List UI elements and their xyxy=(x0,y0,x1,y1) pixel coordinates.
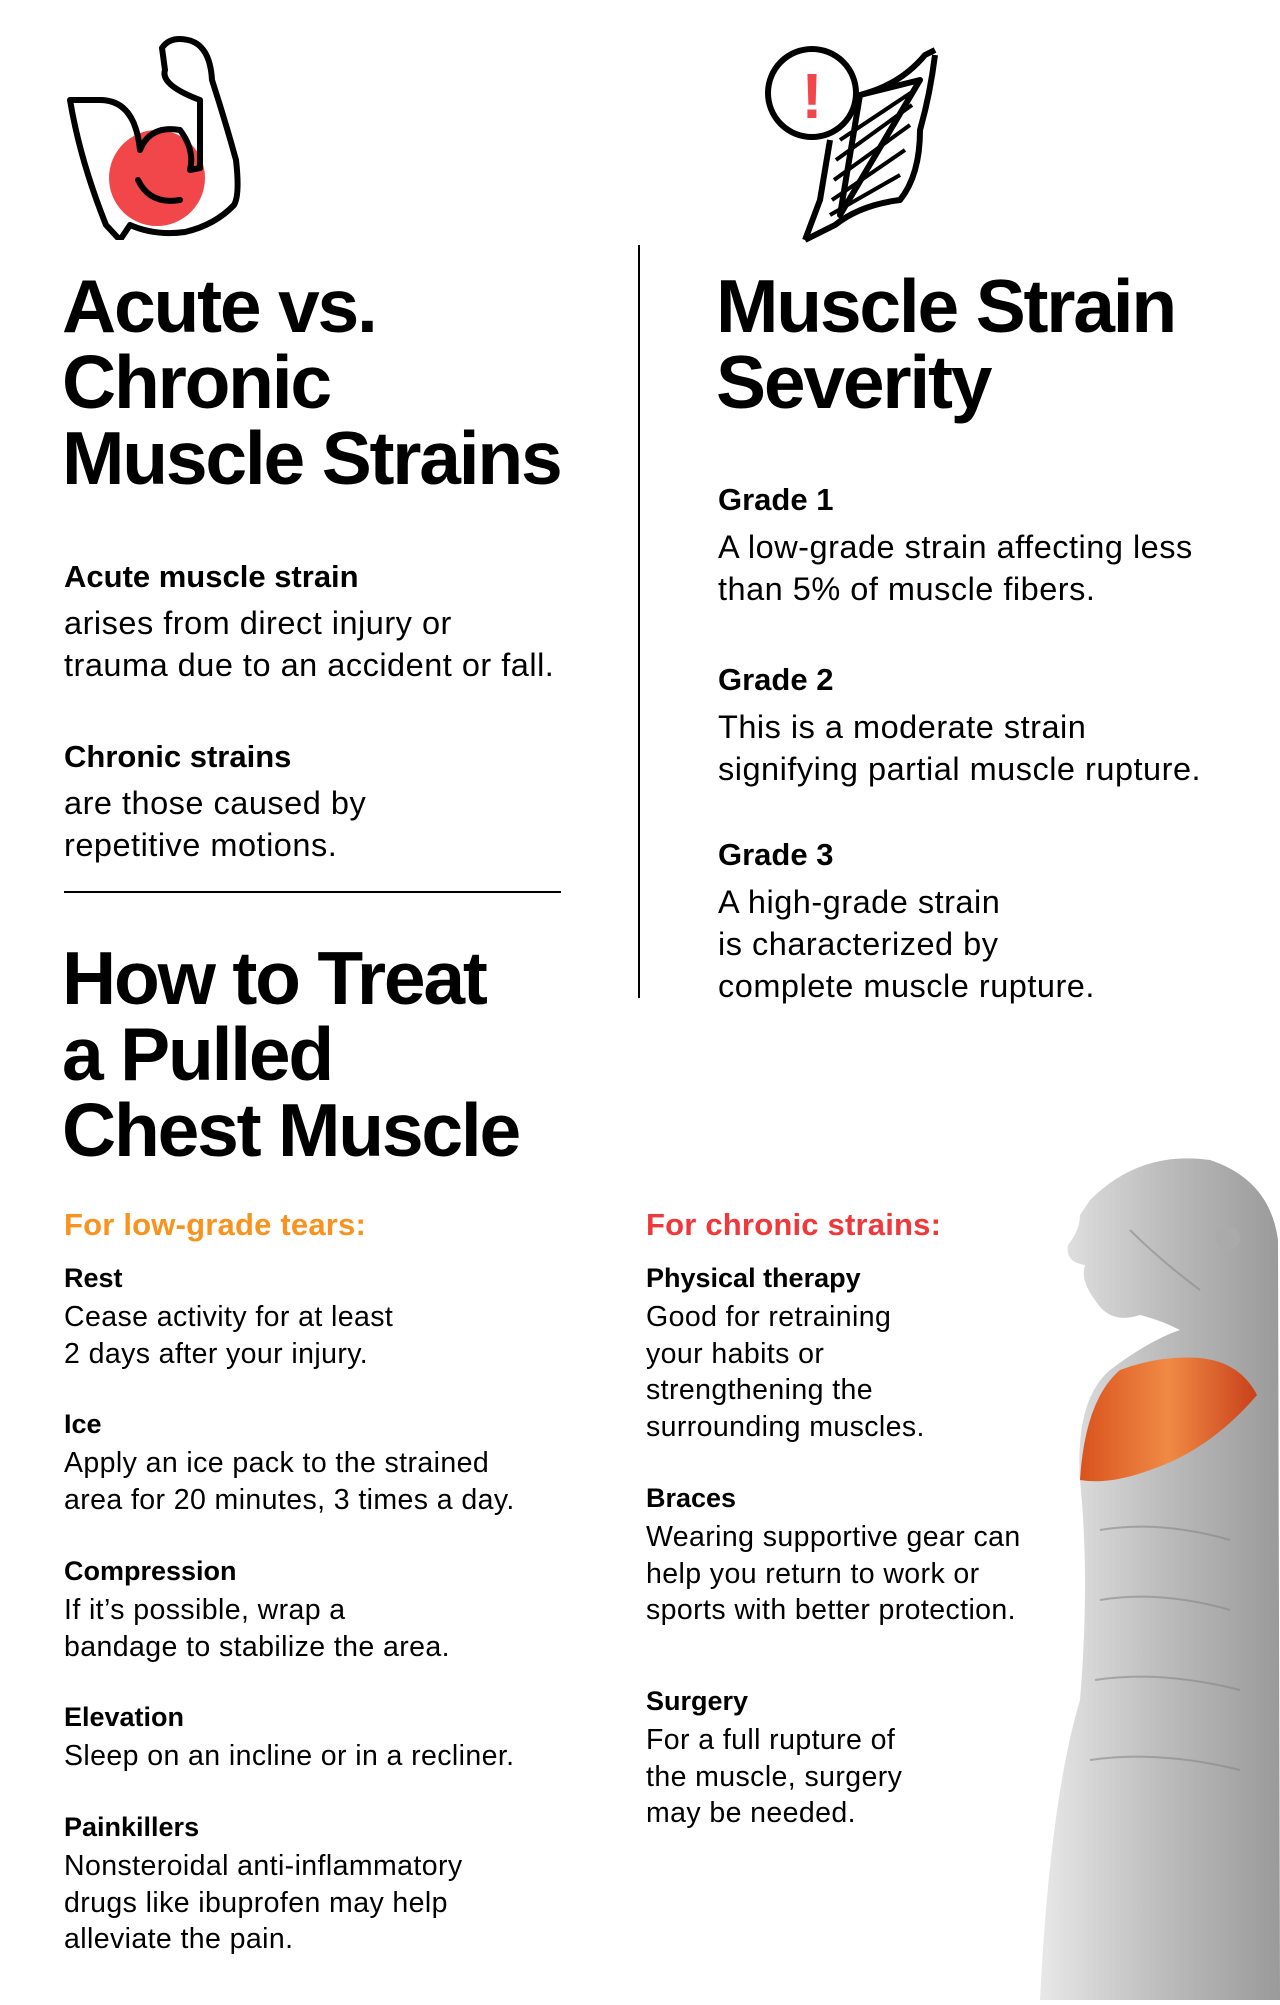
heading: acute vs chronic: Chronic xyxy=(62,340,330,424)
item: surgery: the muscle, surgery xyxy=(646,1760,902,1792)
item: painkillers xyxy=(64,1812,462,1955)
heading: acute vs chronic: Acute vs. xyxy=(62,264,376,348)
grade 2: This is a moderate strain xyxy=(718,709,1086,745)
text block: chronic: repetitive motions. xyxy=(64,827,337,863)
item: braces: sports with better protection. xyxy=(646,1594,1016,1626)
item: physical therapy: surrounding muscles. xyxy=(646,1410,925,1442)
item: physical therapy: strengthening the xyxy=(646,1374,873,1406)
grade 2: signifying partial muscle rupture. xyxy=(718,751,1201,787)
grade 3 xyxy=(718,837,1095,1004)
item: rest xyxy=(64,1263,393,1370)
grade 3: Grade 3 xyxy=(718,837,833,872)
item: ice: area for 20 minutes, 3 times a day. xyxy=(64,1484,515,1516)
item: rest: Cease activity for at least xyxy=(64,1301,393,1333)
item: rest: 2 days after your injury. xyxy=(64,1338,368,1370)
item: ice: Ice xyxy=(64,1409,102,1439)
item: surgery xyxy=(646,1686,902,1829)
item: rest: Rest xyxy=(64,1263,123,1293)
item: physical therapy xyxy=(646,1263,925,1442)
grade 3: A high-grade strain xyxy=(718,884,1000,920)
icon: muscle with exclamation xyxy=(765,46,938,243)
grade 1 xyxy=(718,482,1193,607)
heading: how to treat: How to Treat xyxy=(62,936,486,1020)
subheading: low-grade: For low-grade tears: xyxy=(64,1207,366,1242)
anatomy figure xyxy=(1040,1158,1280,2000)
item: physical therapy: Physical therapy xyxy=(646,1263,861,1293)
item: physical therapy: your habits or xyxy=(646,1338,824,1370)
item: elevation: Sleep on an incline or in a recliner. xyxy=(64,1740,514,1772)
text block: chronic: are those caused by xyxy=(64,785,366,821)
item: braces xyxy=(646,1483,1021,1626)
item: physical therapy: Good for retraining xyxy=(646,1301,891,1333)
grade 1: than 5% of muscle fibers. xyxy=(718,571,1095,607)
item: painkillers: alleviate the pain. xyxy=(64,1923,293,1955)
heading: how to treat xyxy=(62,936,519,1172)
grade 3: is characterized by xyxy=(718,926,998,962)
grade 3: complete muscle rupture. xyxy=(718,968,1095,1004)
item: ice: Apply an ice pack to the strained xyxy=(64,1447,489,1479)
item: braces: Wearing supportive gear can xyxy=(646,1521,1021,1553)
item: ice xyxy=(64,1409,515,1516)
item: compression: bandage to stabilize the area. xyxy=(64,1630,450,1662)
item: braces: Braces xyxy=(646,1483,736,1513)
text block: acute: arises from direct injury or xyxy=(64,605,452,641)
divider: horizontal xyxy=(64,891,561,893)
grade 1: Grade 1 xyxy=(718,482,833,517)
text block: acute: trauma due to an accident or fall. xyxy=(64,647,554,683)
item: surgery: may be needed. xyxy=(646,1797,856,1829)
text block: chronic xyxy=(64,739,366,863)
item: painkillers: Painkillers xyxy=(64,1812,199,1842)
item: elevation xyxy=(64,1702,514,1772)
icon: flexed arm with red circle xyxy=(67,36,241,240)
item: painkillers: drugs like ibuprofen may help xyxy=(64,1886,448,1918)
heading: severity: Muscle Strain xyxy=(716,264,1175,348)
text block: acute: Acute muscle strain xyxy=(64,559,359,594)
item: surgery: Surgery xyxy=(646,1686,748,1716)
item: compression xyxy=(64,1556,450,1662)
text block: acute xyxy=(64,559,554,683)
heading: severity: Severity xyxy=(716,340,990,424)
item: compression: Compression xyxy=(64,1556,237,1586)
heading: acute vs chronic xyxy=(62,264,561,500)
divider: vertical xyxy=(638,245,640,998)
item: compression: If it’s possible, wrap a xyxy=(64,1594,346,1626)
grade 2: Grade 2 xyxy=(718,662,833,697)
item: painkillers: Nonsteroidal anti-inflammatory xyxy=(64,1850,462,1882)
heading: how to treat: Chest Muscle xyxy=(62,1088,519,1172)
grade 2 xyxy=(718,662,1201,787)
item: braces: help you return to work or xyxy=(646,1558,980,1590)
grade 1: A low-grade strain affecting less xyxy=(718,529,1193,565)
icon: muscle with exclamation: ! xyxy=(801,60,823,132)
item: elevation: Elevation xyxy=(64,1702,184,1732)
heading: acute vs chronic: Muscle Strains xyxy=(62,416,561,500)
subheading: chronic: For chronic strains: xyxy=(646,1207,941,1242)
item: surgery: For a full rupture of xyxy=(646,1724,895,1756)
text block: chronic: Chronic strains xyxy=(64,739,291,774)
heading: severity xyxy=(716,264,1175,424)
heading: how to treat: a Pulled xyxy=(62,1012,332,1096)
